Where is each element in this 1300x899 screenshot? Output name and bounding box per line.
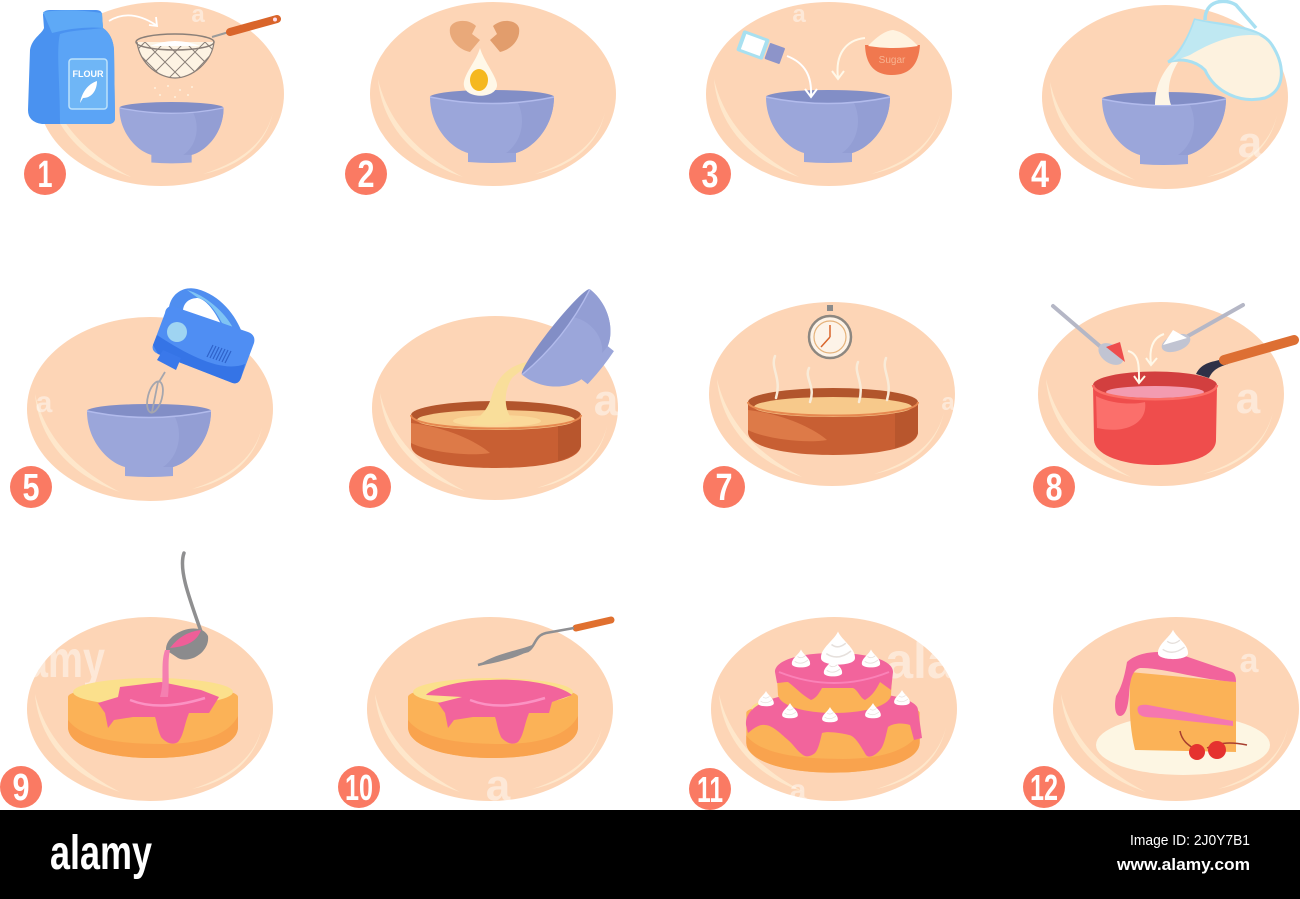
badge 2: 2 xyxy=(358,154,374,196)
steam xyxy=(774,356,889,402)
badge 7: 7 xyxy=(716,467,732,509)
icon: flour bag xyxy=(28,10,115,124)
watermark 1: a xyxy=(191,1,205,28)
top icing xyxy=(775,653,893,700)
plate 9 xyxy=(27,617,273,801)
flour dust xyxy=(154,85,193,98)
badge 7 xyxy=(703,466,745,509)
filling band xyxy=(1137,705,1233,726)
top icing rim xyxy=(779,672,889,683)
watermark 4: a xyxy=(1238,118,1263,167)
icing spread 10 xyxy=(426,680,572,744)
footer bar xyxy=(0,810,1300,899)
tilted bowl xyxy=(517,285,635,411)
watermark 12: a xyxy=(1240,642,1260,680)
icon: jug xyxy=(1168,1,1281,100)
watermark 3: a xyxy=(792,1,806,28)
icon: falling egg xyxy=(464,48,497,96)
arrow sugar xyxy=(832,38,865,79)
icon: sugar bowl: Sugar xyxy=(879,55,906,66)
badge 9: 9 xyxy=(12,767,30,809)
mixing bowl 1 xyxy=(119,102,224,163)
badge 10: 10 xyxy=(345,767,373,808)
icon: ladle with stream xyxy=(160,553,208,697)
icon: whisk xyxy=(144,372,166,414)
step 10: spread icing xyxy=(338,617,613,810)
image id: Image ID: 2J0Y7B1 xyxy=(1130,832,1250,849)
icon: cherries xyxy=(1180,731,1247,760)
meringues xyxy=(758,632,910,722)
badge 8 xyxy=(1033,466,1075,509)
step 12: serve slice xyxy=(1023,617,1299,808)
icon: flour bag: FLOUR xyxy=(72,69,104,79)
batter stream xyxy=(469,361,533,425)
arrow salt xyxy=(787,56,817,97)
step 3: salt and sugar xyxy=(689,1,952,196)
plate 8 xyxy=(1038,302,1284,486)
baking pan 6 xyxy=(411,401,581,468)
badge 11: 11 xyxy=(697,769,723,810)
badge 9 xyxy=(0,766,42,809)
step 2: add egg xyxy=(345,1,616,196)
icon: spatula xyxy=(478,620,611,666)
badge 4: 4 xyxy=(1031,154,1049,196)
top icing slice xyxy=(1115,652,1236,716)
step 1: sift flour xyxy=(24,1,284,196)
plate 12 xyxy=(1053,617,1299,801)
sponge cake 10 xyxy=(408,678,578,758)
baking pan 7 xyxy=(748,388,918,455)
icon: saucepan xyxy=(1093,340,1294,465)
badge 2 xyxy=(345,153,387,196)
arrow berry xyxy=(1128,351,1145,383)
plate 5 xyxy=(27,317,273,501)
footer logo: alamy xyxy=(50,827,152,880)
step 4: pour milk xyxy=(1019,1,1288,196)
badge 8: 8 xyxy=(1046,467,1062,509)
watermark 6: a xyxy=(594,376,619,425)
cake slice xyxy=(1130,672,1236,752)
step 6: pour batter xyxy=(349,285,635,509)
watermark 11b: a xyxy=(790,774,807,807)
plate 2 xyxy=(370,2,616,186)
watermark 2: a xyxy=(596,1,610,28)
icon: salt shaker xyxy=(736,30,785,64)
mixing bowl 5 xyxy=(87,404,211,477)
plate 4 xyxy=(1042,5,1288,189)
step 7: bake xyxy=(703,302,955,509)
badge 3 xyxy=(689,153,731,196)
icon: eggshells xyxy=(450,21,519,52)
badge 12: 12 xyxy=(1030,767,1058,808)
plate 10 xyxy=(367,617,613,801)
icing pool 9 xyxy=(98,682,219,744)
step 5: mix xyxy=(10,288,273,509)
bottom tier xyxy=(746,694,920,773)
badge 1: 1 xyxy=(38,154,52,196)
arrow 1 xyxy=(109,15,157,26)
watermark 5: a xyxy=(36,386,53,419)
badge 1 xyxy=(24,153,66,196)
meringue slice xyxy=(1158,630,1188,659)
icon: milk stream xyxy=(1155,62,1178,105)
plate 3 xyxy=(706,2,952,186)
watermark 9: lamy xyxy=(15,631,105,689)
plate 7 xyxy=(709,302,955,486)
icon: sieve xyxy=(130,18,277,82)
arrow sugar xyxy=(1146,334,1164,365)
icon: spoon with sugar xyxy=(1159,305,1243,356)
mixing bowl 3 xyxy=(766,90,890,163)
watermark 7: a xyxy=(941,389,955,416)
plate 11 xyxy=(711,617,957,801)
badge 3: 3 xyxy=(702,154,718,196)
website: www.alamy.com xyxy=(1116,855,1250,874)
top tier xyxy=(777,678,892,713)
plate 6 xyxy=(372,316,618,500)
batter pool xyxy=(453,415,541,427)
sponge cake 9 xyxy=(68,678,238,758)
icon: sugar bowl xyxy=(865,30,920,75)
watermark 11: ala xyxy=(885,633,956,689)
badge 6: 6 xyxy=(362,467,378,509)
mixing bowl 2 xyxy=(430,90,554,163)
mixing bowl 4 xyxy=(1102,92,1226,165)
badge 5: 5 xyxy=(22,467,40,509)
badge 5 xyxy=(10,466,52,509)
serving plate xyxy=(1096,715,1270,775)
badge 6 xyxy=(349,466,391,509)
badge 4 xyxy=(1019,153,1061,196)
icon: spoon with berry xyxy=(1053,306,1128,369)
icon: hand mixer xyxy=(153,288,254,383)
step 8: make icing in pot xyxy=(1033,302,1294,509)
bottom icing xyxy=(746,691,922,757)
step 11: decorate cake xyxy=(689,617,957,810)
watermark 10: a xyxy=(486,761,511,810)
step 9: pour icing xyxy=(0,553,273,809)
watermark 8: a xyxy=(1236,374,1261,423)
plate 1 xyxy=(38,2,284,186)
icon: stopwatch xyxy=(809,305,851,358)
